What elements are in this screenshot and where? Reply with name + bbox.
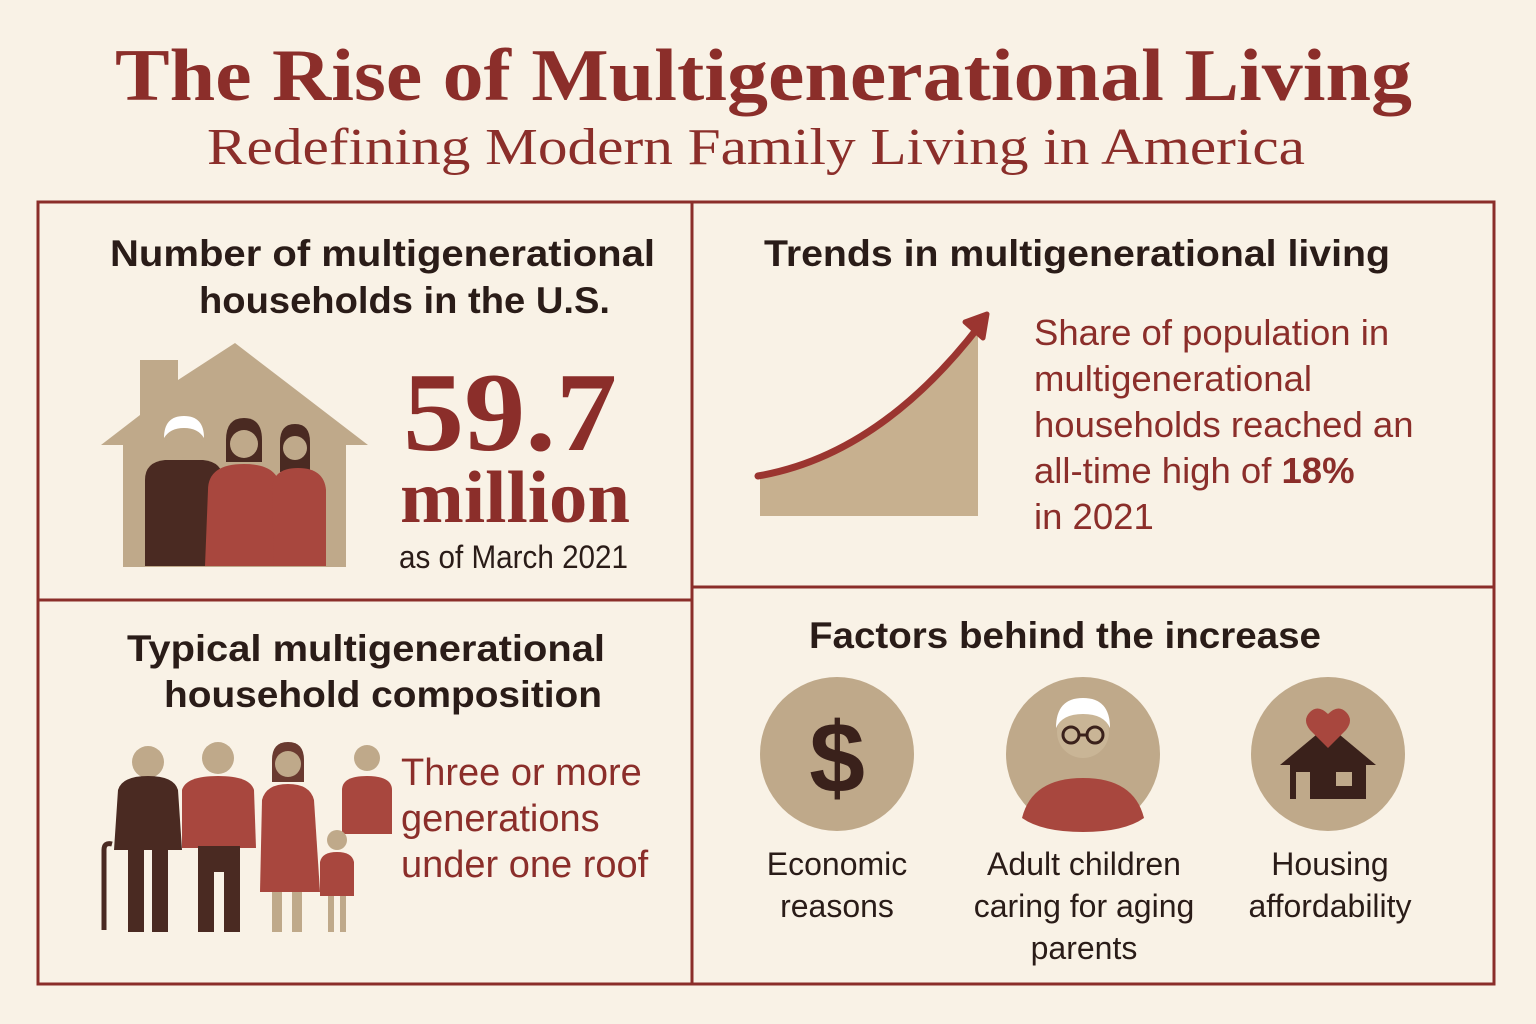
label: economic: reasons [780,888,894,924]
panel: households count: million [400,457,630,539]
big number: 59.7 [403,351,617,475]
label: housing: Housing [1271,846,1389,882]
heading: Number of multigenerational [110,233,655,274]
text: three generations: under one roof [401,844,649,886]
text: share: in 2021 [1034,496,1154,537]
icon: elderly parent [1006,677,1160,832]
label: adult children: Adult children [987,846,1181,882]
panel: composition: household composition [164,674,602,715]
label: housing: affordability [1248,888,1412,924]
label: housing [1248,846,1412,924]
text: share: multigenerational [1034,358,1312,399]
heading: Trends in multigenerational living [764,233,1390,274]
panel frame [38,202,1494,984]
label: adult children: caring for aging [974,888,1194,924]
icon: dollar: $ [809,702,865,814]
heading: Factors behind the increase [809,615,1321,656]
panel: trends [758,233,1414,537]
label: adult children: parents [1031,930,1137,966]
heading: Typical multigenerational [127,628,605,669]
text: share: Share of population in [1034,312,1389,353]
panel: composition [104,628,649,932]
title: The Rise of Multigenerational Living [115,35,1412,117]
label: economic: Economic [767,846,907,882]
text: three generations: Three or more [401,752,642,794]
panel: households count: households in the U.S. [199,280,610,321]
text: share: all-time high of 18% [1034,450,1355,491]
icon: family figures [104,742,392,932]
text: share: households reached an [1034,404,1414,445]
text: share [1034,312,1414,537]
panel: factors [760,615,1412,966]
icon: house with heart [1251,677,1405,831]
chart: rising curve [758,314,987,516]
icon: dollar [760,677,914,831]
text: three generations [401,752,649,886]
subtitle: Redefining Modern Family Living in America [207,119,1305,176]
text: three generations: generations [401,798,600,840]
label: adult children [974,846,1194,966]
panel: households count: as of March 2021 [399,539,628,575]
panel: households count [101,233,655,575]
label: economic [767,846,907,924]
icon: house with family [101,343,368,567]
